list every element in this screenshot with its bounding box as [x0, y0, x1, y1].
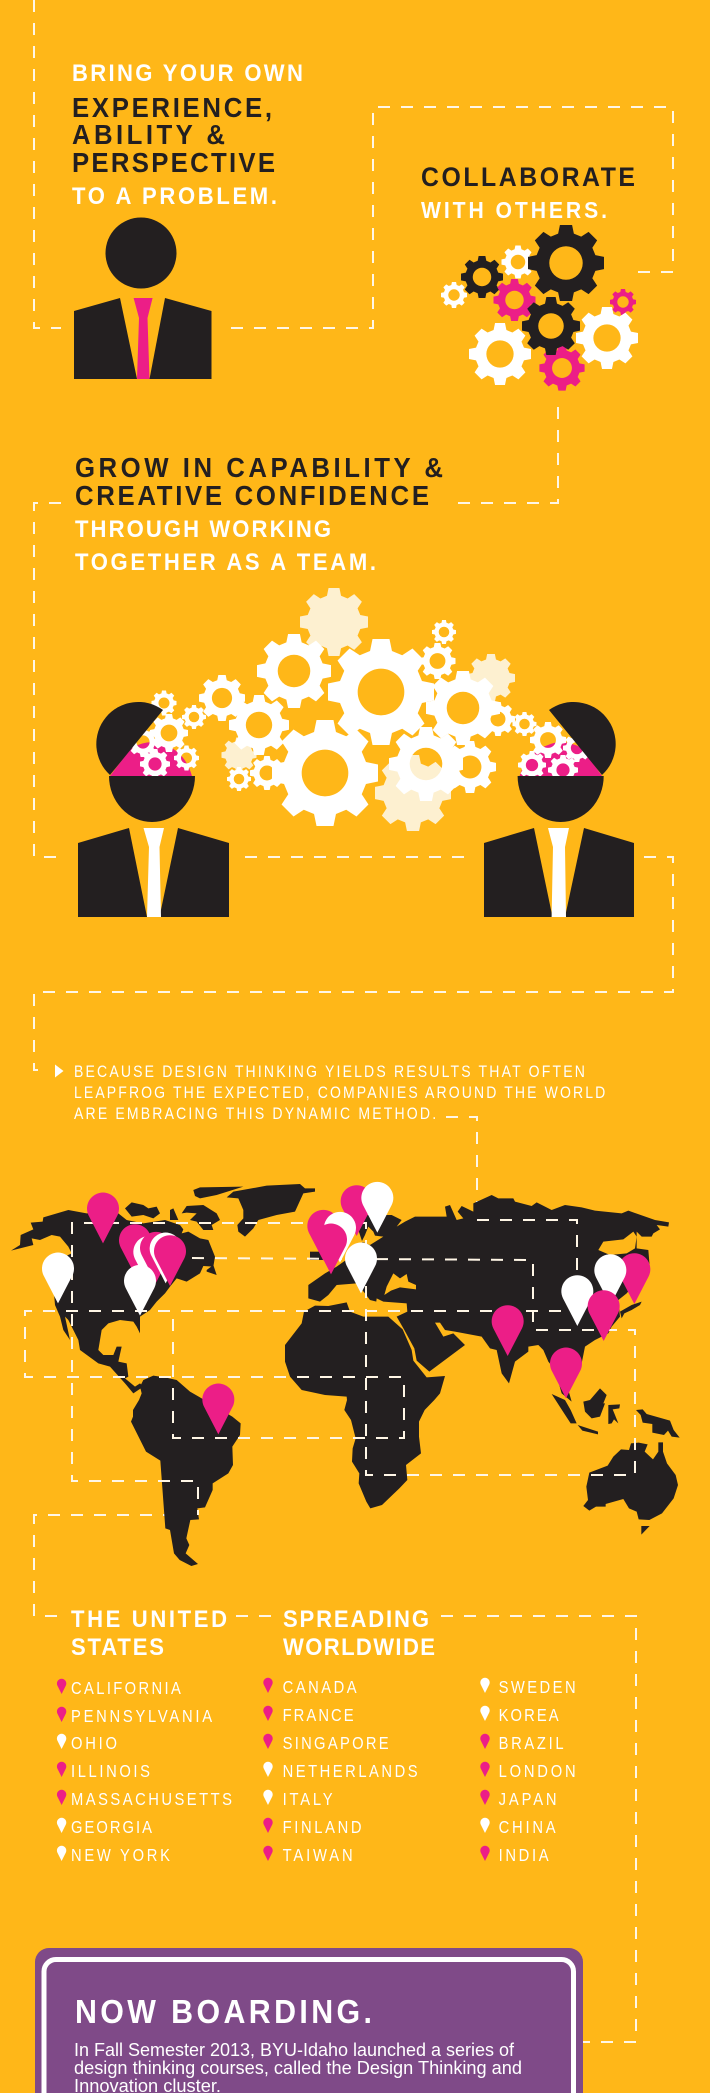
map: South America: [131, 1376, 241, 1566]
heading: now boarding: NOW BOARDING.: [75, 1993, 372, 2030]
list: united states: NEW YORK: [71, 1846, 170, 1865]
heading: grow in capability: GROW IN CAPABILITY &: [75, 452, 443, 483]
list: worldwide column one: SINGAPORE: [283, 1734, 389, 1753]
list: worldwide column two: INDIA: [499, 1846, 549, 1865]
list: worldwide column one: FRANCE: [283, 1706, 354, 1725]
list: united states: PENNSYLVANIA: [71, 1707, 212, 1726]
list: worldwide column one: CANADA: [283, 1678, 357, 1697]
map route lines over land: [25, 1220, 635, 1515]
map: United Kingdom: [310, 1252, 325, 1260]
list: worldwide column two: CHINA: [499, 1818, 556, 1837]
list: worldwide column one: [263, 1678, 418, 1865]
icon: team gears cloud: [128, 588, 591, 831]
heading: bring your own: ABILITY &: [72, 119, 225, 150]
map: inland seas: [362, 1227, 637, 1317]
paragraph: design thinking yields results: [74, 1063, 605, 1123]
paragraph: design thinking yields results: ARE EMBRACING THIS DYNAMIC METHOD.: [74, 1105, 436, 1123]
heading: grow in capability: CREATIVE CONFIDENCE: [75, 480, 429, 511]
heading: the united states: STATES: [71, 1633, 164, 1660]
heading: spreading worldwide: WORLDWIDE: [283, 1633, 435, 1660]
heading: bring your own: PERSPECTIVE: [72, 147, 275, 178]
world map: [11, 1182, 680, 1566]
icon: collaborate gears cluster: [441, 225, 638, 391]
list: united states: CALIFORNIA: [71, 1679, 181, 1698]
map: Australia and Tasmania: [583, 1442, 678, 1535]
list: worldwide column two: KOREA: [499, 1706, 559, 1725]
list: worldwide column two: LONDON: [499, 1762, 576, 1781]
map: Arctic islands: [125, 1202, 220, 1275]
icon: pink brain behind left head: [110, 742, 192, 776]
map: Indonesia and New Guinea: [552, 1388, 680, 1438]
heading: collaborate: [421, 163, 635, 223]
list: worldwide column one: NETHERLANDS: [283, 1762, 418, 1781]
text: cluster description: In Fall Semester 2013, BYU-Idaho launched a series of: [74, 2040, 515, 2060]
map pins: [42, 1182, 650, 1434]
heading: bring your own: [72, 59, 303, 209]
list: worldwide column one: ITALY: [283, 1790, 333, 1809]
icon: arrow marker: [55, 1064, 64, 1078]
list: united states: [57, 1679, 232, 1865]
heading: the united states: THE UNITED: [71, 1605, 227, 1632]
heading: spreading worldwide: [283, 1605, 435, 1660]
list: worldwide column two: [480, 1678, 576, 1865]
icon: person with pink tie: [74, 218, 212, 379]
list: united states: GEORGIA: [71, 1818, 152, 1837]
heading: spreading worldwide: SPREADING: [283, 1605, 429, 1632]
text: cluster description: [74, 2040, 522, 2093]
icon: pink brain behind right head: [520, 742, 602, 776]
list: worldwide column one: FINLAND: [283, 1818, 362, 1837]
panel: now boarding sign: [35, 1948, 583, 2093]
paragraph: design thinking yields results: BECAUSE DESIGN THINKING YIELDS RESULTS THAT OFTEN: [74, 1063, 585, 1081]
heading: bring your own: EXPERIENCE,: [72, 92, 272, 123]
list: worldwide column two: SWEDEN: [499, 1678, 576, 1697]
list: worldwide column one: TAIWAN: [283, 1846, 353, 1865]
heading: collaborate: COLLABORATE: [421, 163, 635, 192]
list: worldwide column two: JAPAN: [499, 1790, 557, 1809]
map: Africa: [285, 1302, 445, 1508]
heading: collaborate: WITH OTHERS.: [421, 197, 607, 223]
map: Greenland: [193, 1184, 315, 1237]
list: united states: MASSACHUSETTS: [71, 1790, 232, 1809]
list: worldwide column two: BRAZIL: [499, 1734, 564, 1753]
heading: the united states: [71, 1605, 227, 1660]
paragraph: design thinking yields results: LEAPFROG THE EXPECTED, COMPANIES AROUND THE WORLD: [74, 1084, 605, 1102]
map: Eurasia: [308, 1195, 669, 1402]
icon: right person with open head: [484, 702, 634, 917]
map: North America: [11, 1210, 215, 1393]
heading: grow in capability: TOGETHER AS A TEAM.: [75, 548, 376, 575]
heading: bring your own: BRING YOUR OWN: [72, 59, 303, 86]
list: united states: ILLINOIS: [71, 1762, 150, 1781]
text: cluster description: design thinking courses, called the Design Thinking and: [74, 2058, 522, 2078]
heading: bring your own: TO A PROBLEM.: [72, 182, 277, 209]
icon: left person with open head: [78, 702, 229, 917]
map: Japan: [620, 1302, 642, 1318]
list: united states: OHIO: [71, 1734, 117, 1753]
heading: grow in capability: [75, 452, 443, 575]
heading: grow in capability: THROUGH WORKING: [75, 515, 331, 542]
